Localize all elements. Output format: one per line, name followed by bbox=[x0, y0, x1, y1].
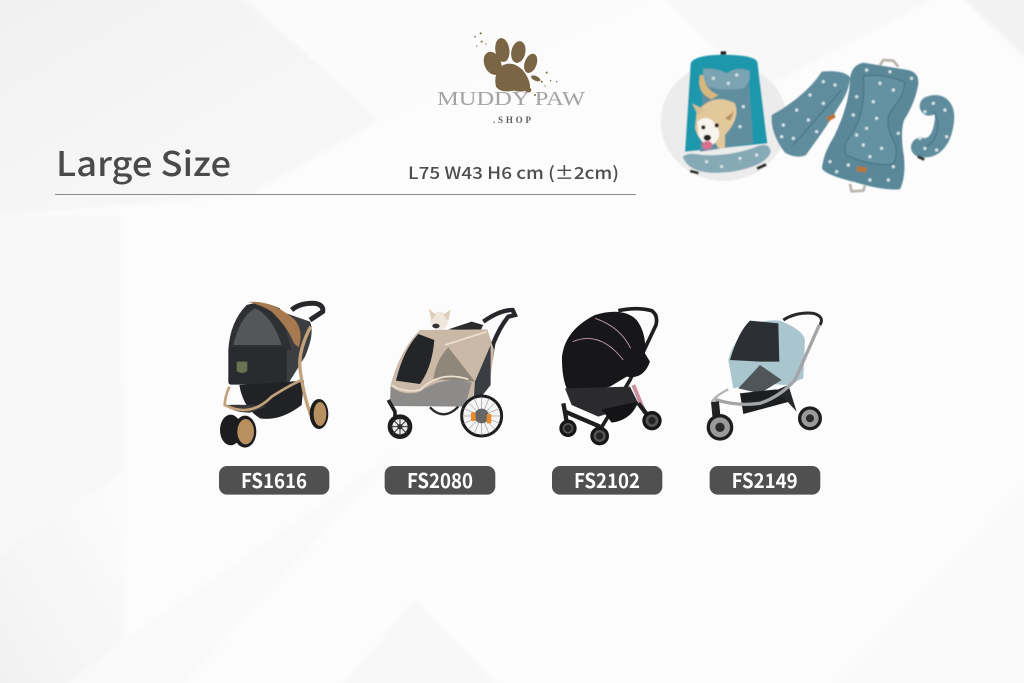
stroller bassinet with dog bbox=[683, 51, 771, 174]
logo: Muddy Paw Shop bbox=[437, 32, 585, 125]
pad motif dots bbox=[705, 68, 948, 182]
logo wordmark: MUDDY PAW bbox=[437, 88, 585, 110]
label FS2102 bbox=[552, 465, 662, 495]
label FS2149: FS2149 bbox=[732, 465, 798, 494]
title: Large Size bbox=[56, 137, 231, 186]
heading divider bbox=[55, 194, 636, 195]
label FS2080: FS2080 bbox=[407, 465, 473, 494]
stroller group: FS1616 and FS2080 bbox=[219, 302, 515, 495]
dimensions text: L75 W43 H6 cm (±2cm) bbox=[408, 159, 619, 184]
label FS1616: FS1616 bbox=[241, 465, 307, 494]
label FS1616 bbox=[219, 465, 329, 495]
label FS2149 bbox=[710, 465, 820, 495]
stroller FS1616 bbox=[220, 302, 328, 448]
stroller FS2080 bbox=[388, 309, 515, 437]
stroller FS2102 bbox=[561, 309, 660, 444]
photo backdrop circle bbox=[661, 62, 787, 181]
logo sub text: .SHOP bbox=[493, 115, 532, 125]
stroller FS2149 bbox=[708, 313, 821, 439]
label FS2102: FS2102 bbox=[574, 465, 640, 494]
label FS2080 bbox=[385, 465, 495, 495]
seat pad bbox=[822, 60, 918, 191]
neck pillow bbox=[917, 105, 945, 161]
icon: muddy paw print bbox=[474, 32, 557, 96]
stroller group: FS2102 and FS2149 bbox=[552, 309, 821, 495]
product photo: pet stroller pads bbox=[661, 51, 948, 191]
side pad bbox=[772, 71, 850, 157]
